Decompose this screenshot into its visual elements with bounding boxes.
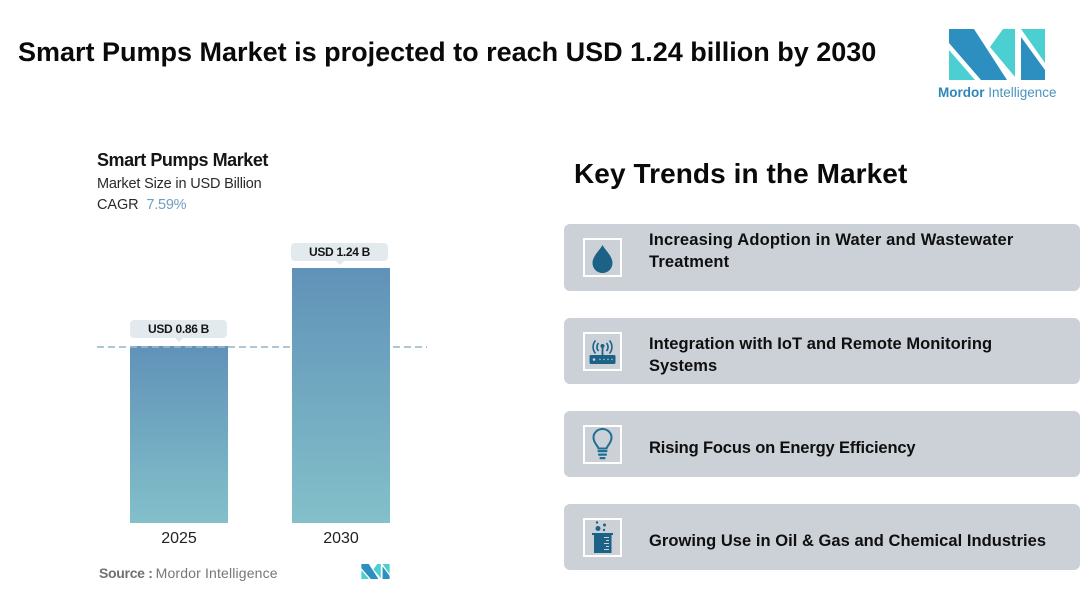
value label: 2030: USD 1.24 B	[309, 245, 370, 259]
panel: trend 2	[564, 318, 1080, 384]
value label: 2030	[291, 243, 388, 261]
value label: 2025	[130, 320, 227, 338]
heading: key trends: Key Trends in the Market	[574, 158, 907, 189]
text: Treatment	[649, 253, 729, 271]
panel: trend 4	[564, 504, 1080, 570]
axis label: 2025: 2025	[161, 530, 197, 547]
bar chart	[97, 243, 427, 547]
reference dashed line	[97, 346, 427, 348]
icon: small logo	[361, 564, 390, 579]
text	[649, 335, 992, 375]
text: Systems	[649, 357, 717, 375]
logo: Mordor Intelligence	[938, 29, 1057, 100]
value label: 2025: USD 0.86 B	[148, 322, 209, 336]
icon: water drop	[583, 238, 622, 277]
bar: 2030	[292, 268, 390, 523]
panel: trend 1	[564, 224, 1080, 291]
text: Rising Focus on Energy Efficiency	[649, 439, 915, 457]
icon: beaker	[583, 518, 622, 557]
icon: wifi router	[583, 332, 622, 371]
chart subtitle: Market Size in USD Billion	[97, 176, 262, 192]
title: Smart Pumps Market is projected to reach USD 1.24 billion by 2030	[18, 37, 876, 67]
CAGR: CAGR 7.59%	[97, 197, 186, 213]
text: Integration with IoT and Remote Monitoring	[649, 335, 992, 353]
text	[649, 231, 1014, 271]
icon: light bulb	[583, 425, 622, 464]
logo: Mordor Intelligence: Mordor Intelligence	[938, 85, 1057, 100]
bar: 2025	[130, 346, 228, 523]
text: Increasing Adoption in Water and Wastewater	[649, 231, 1013, 249]
text: Growing Use in Oil & Gas and Chemical Industries	[649, 532, 1046, 550]
axis label: 2030: 2030	[323, 530, 359, 547]
chart heading: Smart Pumps Market	[97, 150, 268, 170]
panel: trend 3	[564, 411, 1080, 477]
source: Source :Mordor Intelligence	[99, 565, 278, 581]
